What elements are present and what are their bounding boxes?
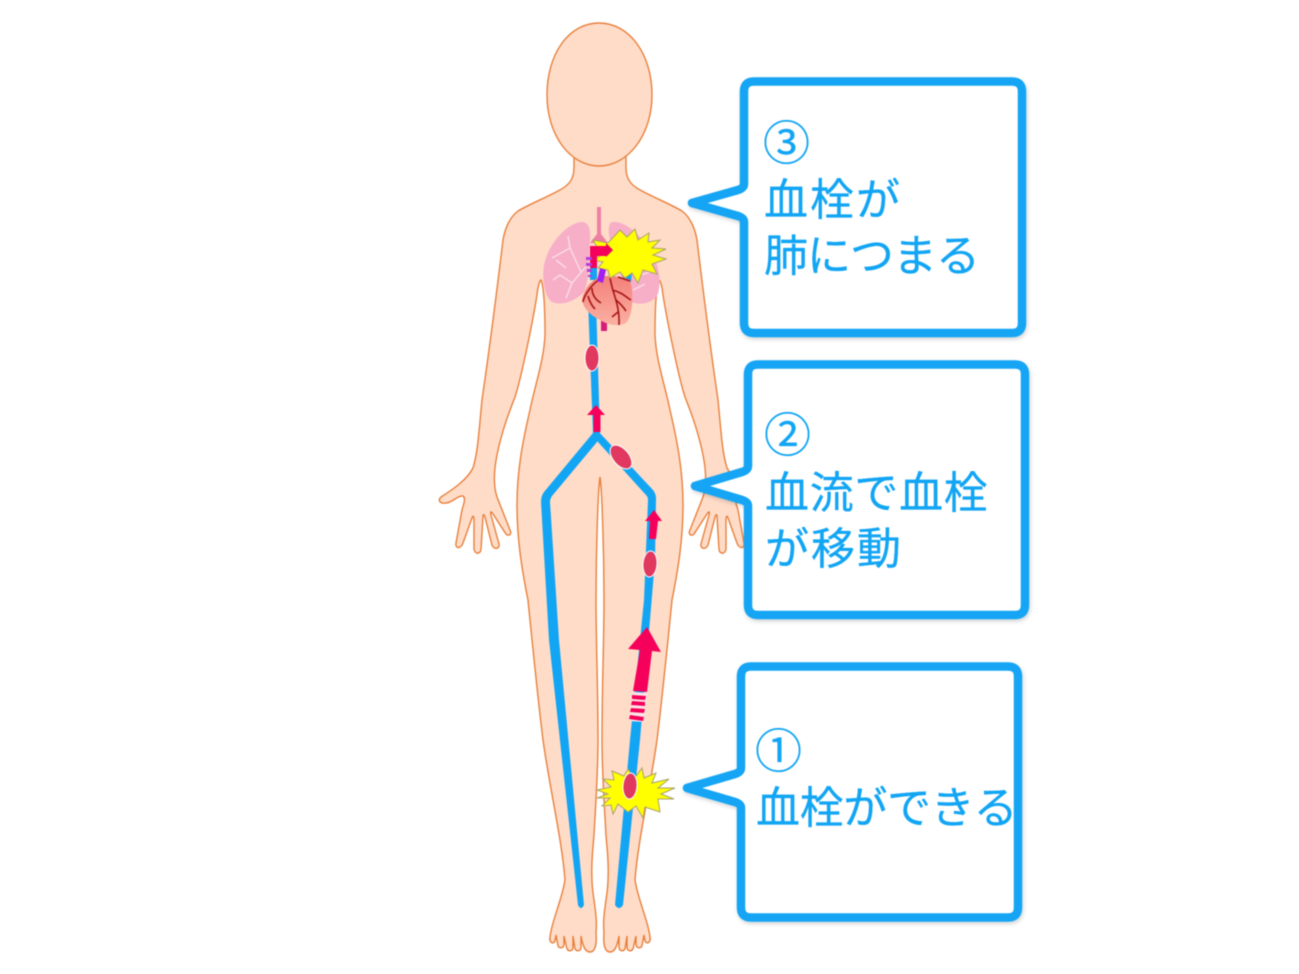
arrow: large thigh xyxy=(628,627,661,692)
body left half xyxy=(439,150,602,952)
magenta vessel stub xyxy=(601,320,607,331)
arrow: upper thigh xyxy=(645,510,662,539)
clot: chest xyxy=(585,345,599,371)
arrow tail stripes xyxy=(629,695,646,721)
bronchi xyxy=(552,236,650,298)
callout 2: migration xyxy=(695,364,1025,615)
arrow: abdomen xyxy=(587,405,605,432)
starburst: clot in leg xyxy=(597,768,675,818)
trachea xyxy=(590,207,608,243)
callout 2 text: ② xyxy=(764,409,811,462)
clot: groin xyxy=(606,441,636,473)
pale gap behind arrow tail xyxy=(629,692,647,722)
arrow tail stripes xyxy=(586,257,592,277)
flow arrows xyxy=(587,405,662,722)
heart xyxy=(582,276,632,325)
blood clots xyxy=(585,345,658,799)
callout 1 text: ① xyxy=(755,725,802,778)
vein: body-right leg xyxy=(597,430,656,908)
purple vessel xyxy=(597,268,606,283)
callout 2 text: 血流で血栓 xyxy=(765,469,988,518)
callout 2 frame xyxy=(695,364,1025,615)
right lung xyxy=(609,222,660,304)
starburst: embolus in lung xyxy=(593,229,666,283)
vein: body-left leg xyxy=(541,430,602,908)
callout 3 text: ③ xyxy=(763,117,810,170)
clot arrow into lung xyxy=(590,243,613,268)
callout 3 text: 肺につまる xyxy=(764,232,979,281)
callout 3 text: 血栓が xyxy=(764,176,902,225)
lungs and heart xyxy=(543,207,660,331)
head xyxy=(547,23,652,166)
callout 1 frame xyxy=(687,666,1018,918)
callout 1 text: 血栓ができる xyxy=(756,784,1017,833)
callout 3 frame xyxy=(692,82,1022,333)
coronary arteries xyxy=(583,277,631,325)
clot: knee xyxy=(622,773,638,799)
callout 1: clot forms xyxy=(687,666,1018,918)
human body figure xyxy=(439,23,761,952)
vein: trunk xyxy=(588,300,600,434)
callout 2 text: が移動 xyxy=(765,525,903,574)
callout 3: lung xyxy=(692,82,1022,333)
blue pulmonary vessel xyxy=(590,266,632,282)
leg and trunk veins xyxy=(541,300,656,908)
left lung xyxy=(543,222,590,304)
clot: thigh xyxy=(642,551,658,577)
body right half xyxy=(598,150,761,952)
